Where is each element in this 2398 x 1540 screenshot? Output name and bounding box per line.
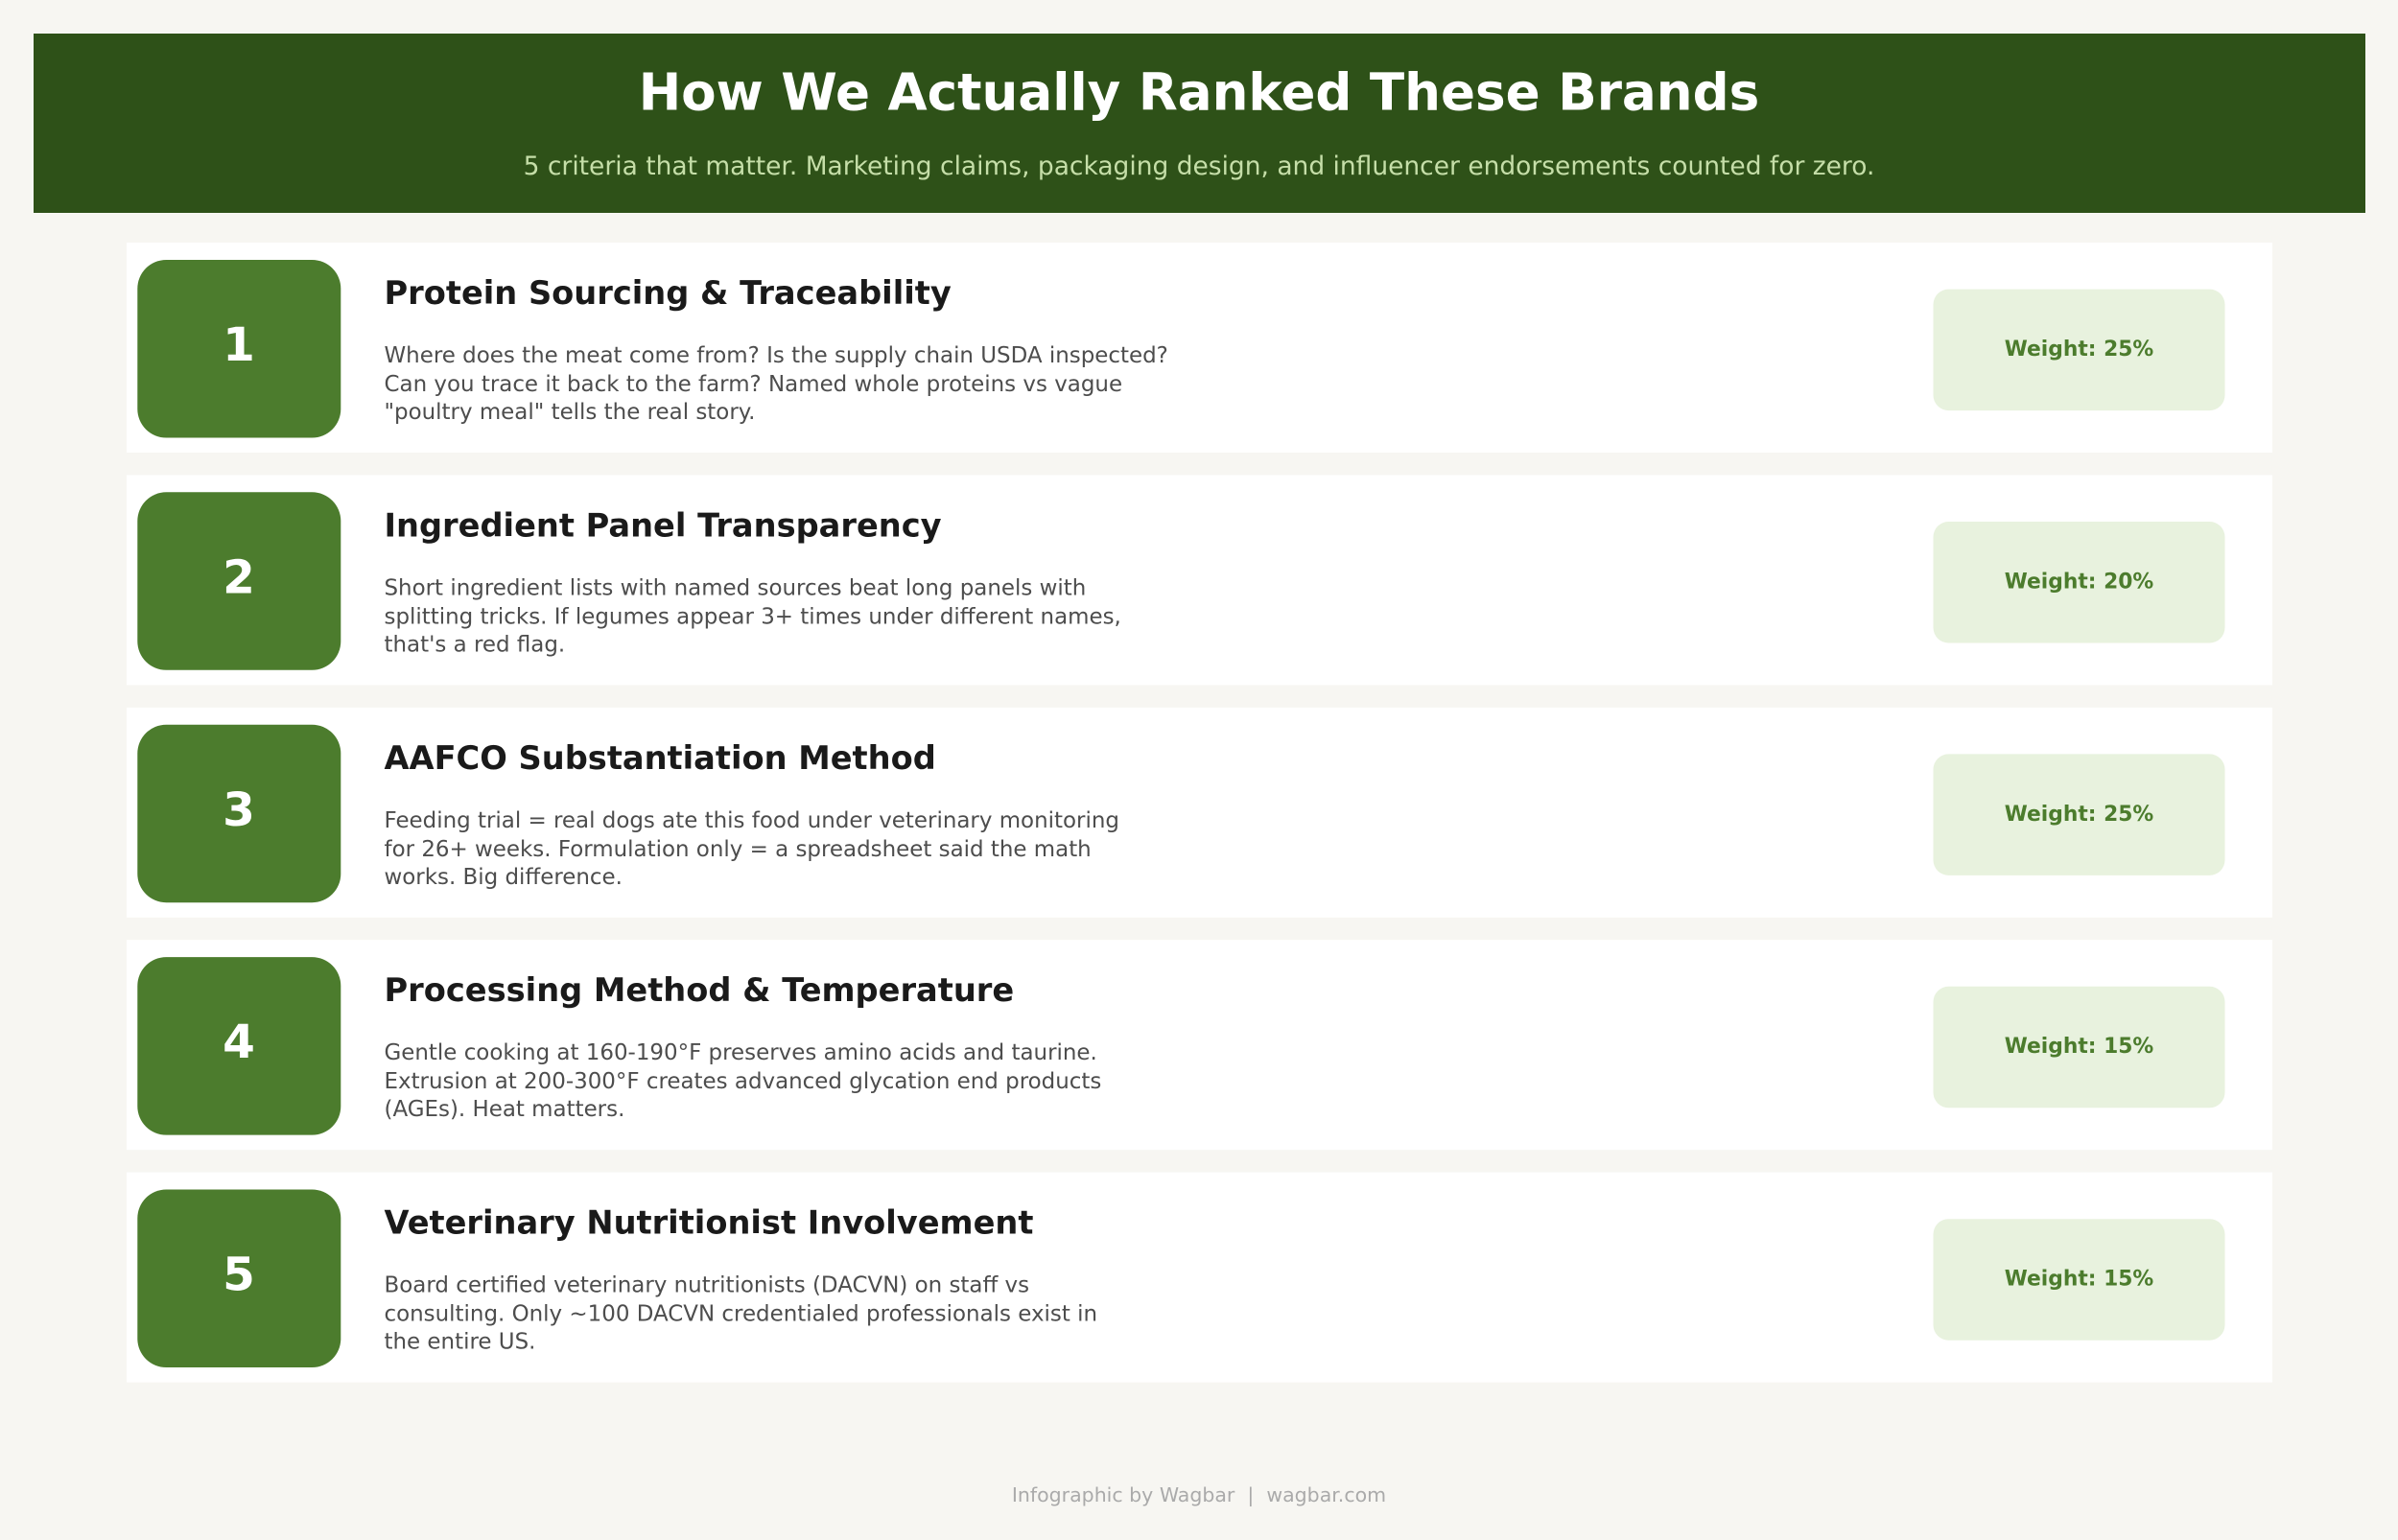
description 5: Board certified veterinary nutritionists (DACVN) on staff vs: [384, 1273, 1029, 1298]
number badge 5: 5: [223, 1248, 255, 1302]
weight tag 2: Weight: 20%: [2005, 570, 2153, 594]
description 5: the entire US.: [384, 1330, 535, 1355]
heading 2: Ingredient Panel Transparency: [384, 506, 942, 544]
number badge 3: 3: [223, 783, 255, 837]
description 2: splitting tricks. If legumes appear 3+ times under different names,: [384, 604, 1121, 629]
weight tag 1: [1934, 290, 2225, 410]
description 1: Where does the meat come from? Is the supply chain USDA inspected?: [384, 343, 1168, 368]
description 4: Gentle cooking at 160-190°F preserves amino acids and taurine.: [384, 1040, 1097, 1065]
panel: criterion 4: [127, 940, 2272, 1150]
weight tag 1: Weight: 25%: [2005, 338, 2153, 362]
description 1: Can you trace it back to the farm? Named whole proteins vs vague: [384, 372, 1122, 397]
weight tag 3: [1934, 754, 2225, 875]
description 4: Extrusion at 200-300°F creates advanced glycation end products: [384, 1069, 1101, 1094]
description 3: works. Big difference.: [384, 865, 623, 890]
description 5: consulting. Only ~100 DACVN credentialed professionals exist in: [384, 1302, 1097, 1327]
description 3: Feeding trial = real dogs ate this food under veterinary monitoring: [384, 808, 1119, 833]
panel: criterion 1: [127, 243, 2272, 453]
description 3: for 26+ weeks. Formulation only = a spreadsheet said the math: [384, 837, 1092, 862]
number badge 2: 2: [223, 550, 255, 604]
number badge 5: [137, 1189, 341, 1367]
description 2: that's a red flag.: [384, 632, 565, 657]
panel: criterion 3: [127, 708, 2272, 918]
panel: criterion 5: [127, 1173, 2272, 1383]
description 1: "poultry meal" tells the real story.: [384, 400, 755, 425]
description 4: (AGEs). Heat matters.: [384, 1097, 624, 1122]
footer credit: Infographic by Wagbar | wagbar.com: [1012, 1483, 1386, 1507]
description 2: Short ingredient lists with named sources beat long panels with: [384, 575, 1086, 600]
number badge 1: 1: [223, 318, 255, 372]
panel: criterion 2: [127, 475, 2272, 685]
heading 5: Veterinary Nutritionist Involvement: [384, 1204, 1033, 1242]
weight tag 5: Weight: 15%: [2005, 1268, 2153, 1292]
number badge 1: [137, 260, 341, 437]
number badge 3: [137, 725, 341, 902]
header banner: [34, 34, 2365, 213]
heading 1: Protein Sourcing & Traceability: [384, 274, 952, 312]
title: How We Actually Ranked These Brands: [639, 63, 1759, 123]
heading 4: Processing Method & Temperature: [384, 971, 1014, 1009]
number badge 2: [137, 492, 341, 670]
number badge 4: 4: [223, 1015, 255, 1069]
weight tag 4: Weight: 15%: [2005, 1035, 2153, 1059]
weight tag 3: Weight: 25%: [2005, 803, 2153, 827]
weight tag 2: [1934, 522, 2225, 642]
weight tag 5: [1934, 1219, 2225, 1341]
subtitle: 5 criteria that matter. Marketing claims, packaging design, and influencer endorsements counted for zero.: [524, 152, 1874, 181]
weight tag 4: [1934, 987, 2225, 1108]
number badge 4: [137, 957, 341, 1135]
heading 3: AAFCO Substantiation Method: [384, 739, 936, 777]
